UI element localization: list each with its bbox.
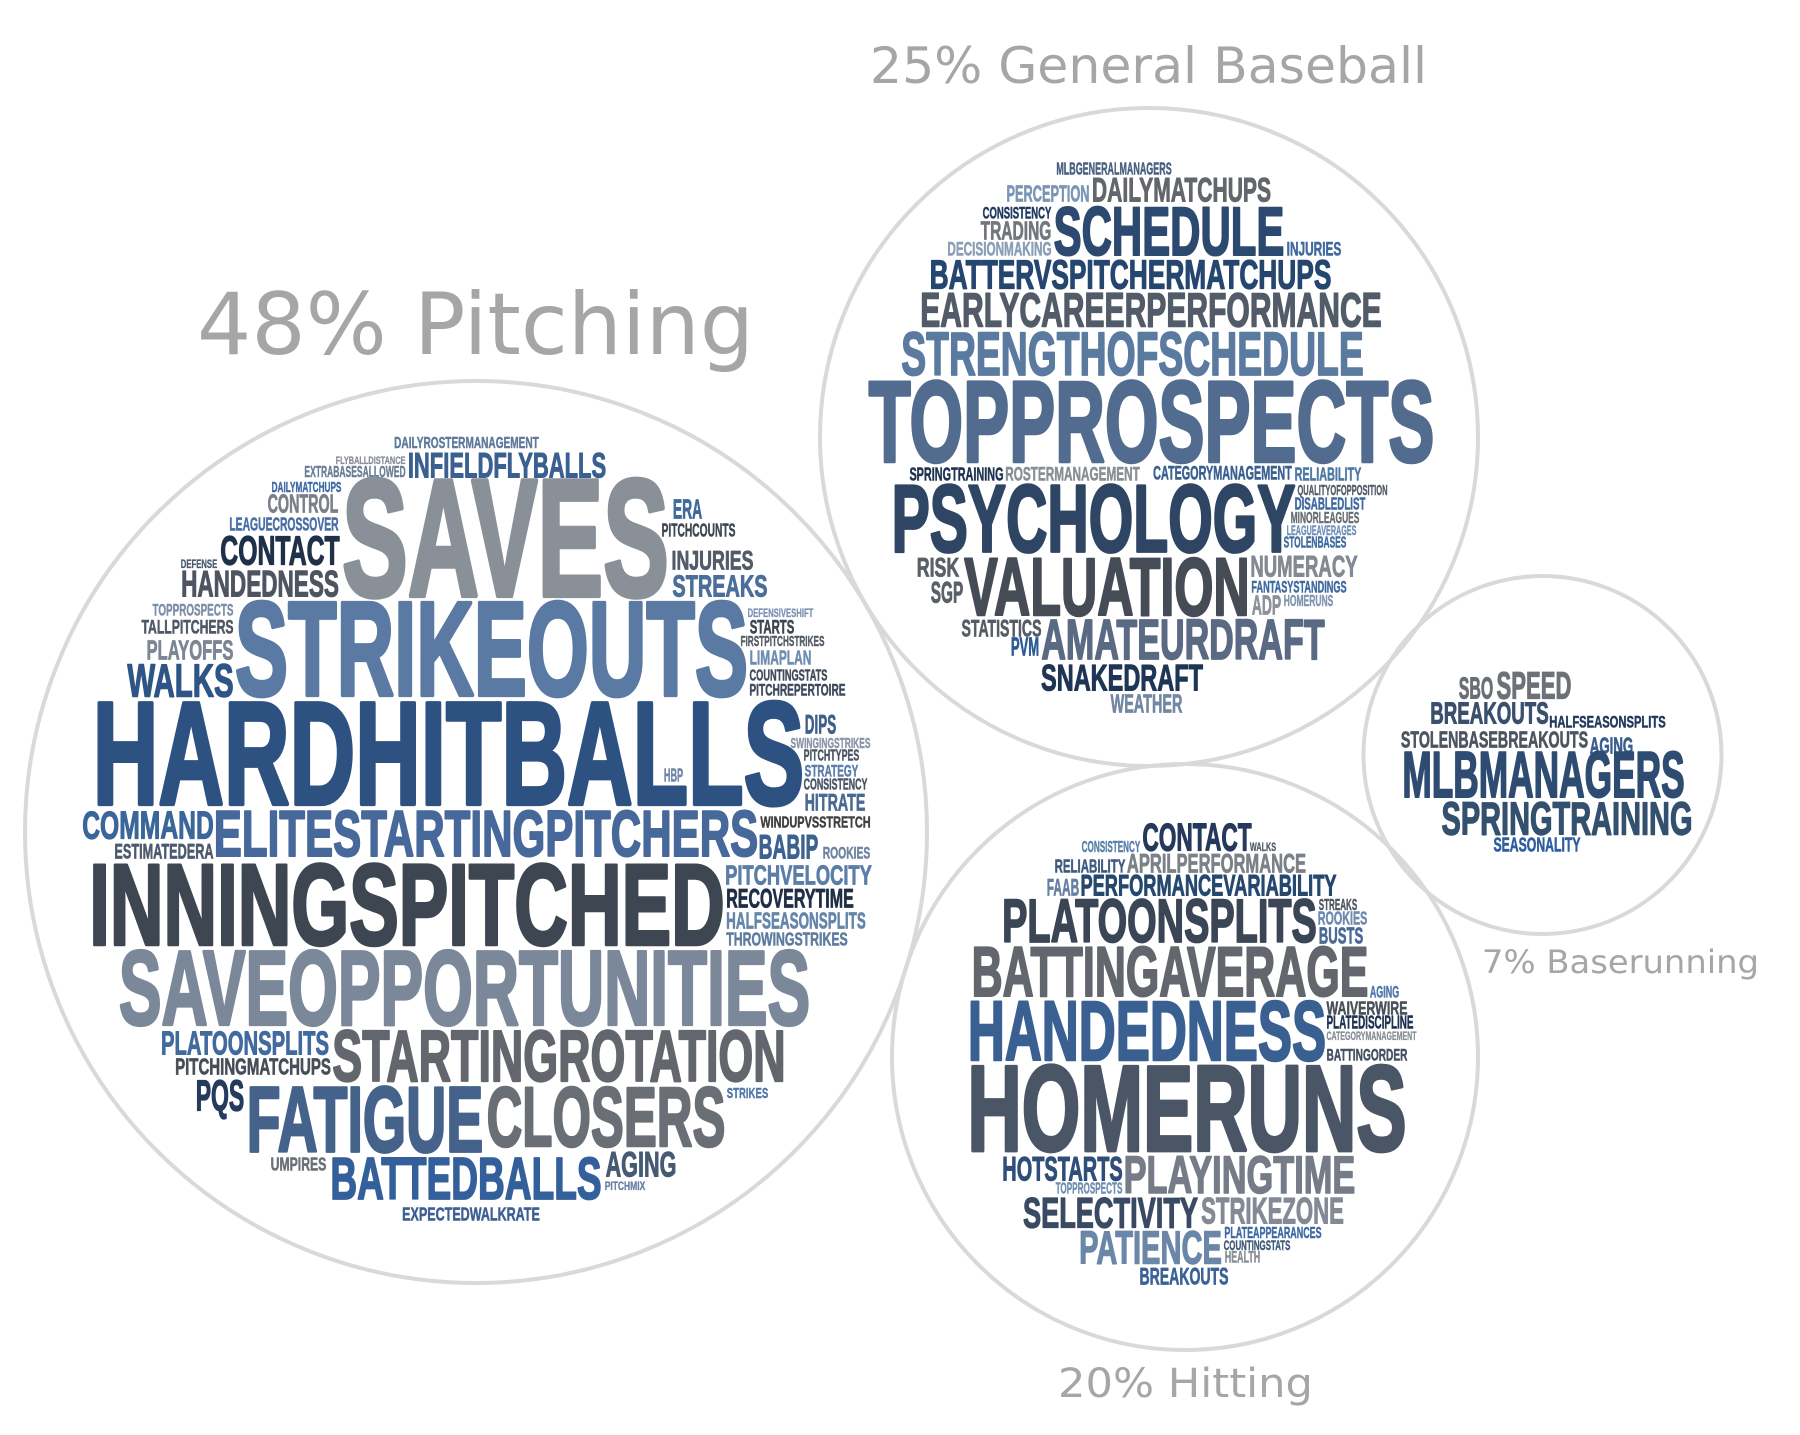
word cloud: hitting: BUSTS xyxy=(1319,923,1363,949)
word cloud: general baseball: CONSISTENCY xyxy=(983,205,1051,223)
word cloud: hitting: CONSISTENCY xyxy=(1082,839,1140,856)
word cloud: pitching: THROWINGSTRIKES xyxy=(726,929,848,950)
circle outline: baserunning xyxy=(1364,576,1722,934)
word cloud: pitching: CONSISTENCY xyxy=(804,777,867,794)
word cloud: hitting: APRILPERFORMANCE xyxy=(1127,848,1306,879)
word cloud: pitching: ERA xyxy=(673,493,702,525)
word cloud: pitching: PITCHCOUNTS xyxy=(662,520,735,541)
word cloud: hitting: PLATEDISCIPLINE xyxy=(1326,1012,1414,1033)
word cloud: general baseball: RELIABILITY xyxy=(1295,464,1361,485)
word cloud: pitching: COMMAND xyxy=(82,804,214,847)
word cloud: pitching: RECOVERYTIME xyxy=(726,883,854,914)
word cloud: general baseball: HOMERUNS xyxy=(1284,593,1333,610)
word cloud: general baseball: DAILYMATCHUPS xyxy=(1092,172,1271,210)
word cloud: pitching: SWINGINGSTRIKES xyxy=(791,736,870,752)
word cloud: general baseball: ROSTERMANAGEMENT xyxy=(1005,464,1140,486)
word cloud: general baseball: CATEGORYMANAGEMENT xyxy=(1153,463,1292,485)
word cloud: pitching: FATIGUE xyxy=(247,1069,483,1172)
word cloud: hitting: WALKS xyxy=(1250,840,1276,854)
word cloud: pitching: LEAGUECROSSOVER xyxy=(229,514,339,535)
word cloud: pitching: BATTEDBALLS xyxy=(330,1145,602,1212)
word cloud: hitting: SELECTIVITY xyxy=(1023,1189,1198,1236)
word cloud: general baseball: TOPPROSPECTS xyxy=(869,357,1434,487)
word cloud: pitching: EXTRABASESALLOWED xyxy=(304,464,406,481)
word cloud: pitching: PITCHTYPES xyxy=(804,748,859,765)
word cloud: baserunning: AGING xyxy=(1590,733,1633,759)
word cloud: general baseball: SCHEDULE xyxy=(1054,193,1284,270)
heading: 20% Hitting: 20% Hitting xyxy=(1058,1361,1313,1407)
word cloud: general baseball xyxy=(869,159,1434,719)
word cloud: pitching: HANDEDNESS xyxy=(181,563,339,605)
word cloud: general baseball: DISABLEDLIST xyxy=(1295,494,1366,514)
word cloud: pitching: DAILYMATCHUPS xyxy=(272,480,341,496)
word cloud: hitting: PERFORMANCEVARIABILITY xyxy=(1080,869,1337,903)
heading: 48% Pitching: 48% Pitching xyxy=(197,275,754,375)
word cloud: pitching: DAILYROSTERMANAGEMENT xyxy=(394,435,539,452)
word cloud: hitting: AGING xyxy=(1370,984,1399,1002)
word cloud: hitting: PLAYINGTIME xyxy=(1124,1147,1355,1205)
word cloud: pitching: INFIELDFLYBALLS xyxy=(408,447,606,486)
word cloud: pitching: PLAYOFFS xyxy=(146,634,234,666)
word cloud: pitching: DEFENSE xyxy=(181,557,217,571)
word cloud: pitching: INNINGSPITCHED xyxy=(89,840,725,970)
word cloud: general baseball: VALUATION xyxy=(964,542,1250,633)
word cloud: pitching: AGING xyxy=(606,1146,676,1185)
panel: pitching xyxy=(25,275,927,1283)
word cloud: general baseball: STOLENBASES xyxy=(1284,535,1346,552)
word cloud: hitting: BREAKOUTS xyxy=(1139,1263,1229,1290)
word cloud: pitching: HALFSEASONSPLITS xyxy=(726,908,866,934)
word cloud: pitching: WALKS xyxy=(127,654,234,706)
word cloud: general baseball: SPRINGTRAINING xyxy=(909,464,1004,485)
word cloud: hitting: ROOKIES xyxy=(1318,908,1367,929)
word cloud: pitching: PITCHREPERTOIRE xyxy=(749,682,846,700)
word cloud: hitting: WAIVERWIRE xyxy=(1327,998,1407,1019)
circle outline: hitting xyxy=(892,764,1478,1350)
word cloud: hitting: COUNTINGSTATS xyxy=(1224,1238,1290,1253)
word cloud: general baseball: EARLYCAREERPERFORMANCE xyxy=(920,284,1382,337)
word cloud: general baseball: WEATHER xyxy=(1111,690,1182,719)
word cloud: pitching: PITCHMIX xyxy=(605,1179,646,1193)
word cloud: pitching: CLOSERS xyxy=(487,1069,725,1164)
word cloud: hitting: HEALTH xyxy=(1225,1249,1260,1267)
word cloud: hitting: RELIABILITY xyxy=(1055,856,1125,877)
word cloud: baserunning: SBO xyxy=(1459,671,1493,706)
heading: 25% General Baseball: 25% General Baseball xyxy=(870,37,1427,95)
word cloud: pitching: HITRATE xyxy=(805,789,865,816)
word cloud: hitting: BATTINGORDER xyxy=(1327,1047,1408,1065)
word cloud: hitting: HOMERUNS xyxy=(967,1040,1407,1176)
word cloud: pitching: STRATEGY xyxy=(805,763,858,781)
word cloud: pitching: CONTROL xyxy=(268,490,338,519)
word cloud: general baseball: PERCEPTION xyxy=(1007,181,1089,207)
word cloud: pitching: STARTS xyxy=(750,617,794,639)
word cloud: pitching: BABIP xyxy=(759,829,818,867)
word cloud: pitching: DEFENSIVESHIFT xyxy=(748,606,814,620)
word cloud: hitting xyxy=(967,816,1417,1290)
word cloud: general baseball: SGP xyxy=(931,576,963,610)
word cloud: hitting: STRIKEZONE xyxy=(1201,1190,1344,1232)
word cloud: pitching: PQS xyxy=(196,1072,244,1120)
word cloud: hitting: HOTSTARTS xyxy=(1002,1151,1123,1189)
word cloud: pitching: ELITESTARTINGPITCHERS xyxy=(214,798,758,870)
word cloud: pitching: SAVEOPPORTUNITIES xyxy=(119,930,810,1048)
panel: hitting xyxy=(892,764,1478,1407)
word cloud: general baseball: RISK xyxy=(917,552,959,583)
word cloud: general baseball: STRENGTHOFSCHEDULE xyxy=(901,320,1364,388)
panel: general baseball xyxy=(820,37,1478,766)
word cloud: pitching: COUNTINGSTATS xyxy=(750,668,827,685)
word cloud: general baseball: LEAGUEAVERAGES xyxy=(1287,523,1356,538)
word cloud: general baseball: DECISIONMAKING xyxy=(947,239,1052,261)
word cloud: pitching: TALLPITCHERS xyxy=(141,617,234,639)
word cloud: general baseball: BATTERVSPITCHERMATCHUPS xyxy=(930,251,1331,297)
word cloud: pitching: LIMAPLAN xyxy=(750,648,811,670)
word cloud: general baseball: PSYCHOLOGY xyxy=(892,466,1295,573)
word cloud: pitching: STRIKEOUTS xyxy=(235,575,748,724)
word cloud: hitting: HANDEDNESS xyxy=(968,983,1326,1078)
word cloud: pitching: FLYBALLDISTANCE xyxy=(336,455,406,467)
word cloud: general baseball: TRADING xyxy=(981,217,1051,246)
word cloud: baserunning: SPEED xyxy=(1497,665,1571,708)
word cloud: pitching: DIPS xyxy=(805,709,836,740)
word cloud: hitting: PLATOONSPLITS xyxy=(1002,887,1317,955)
word cloud: pitching: ESTIMATEDERA xyxy=(114,840,214,864)
word cloud: baserunning: SEASONALITY xyxy=(1493,835,1581,857)
word cloud: general baseball: FANTASYSTANDINGS xyxy=(1251,579,1347,597)
word cloud: baserunning: BREAKOUTS xyxy=(1430,696,1549,731)
word cloud: baserunning xyxy=(1401,665,1692,857)
word cloud: pitching: INJURIES xyxy=(672,545,753,576)
word cloud: pitching: CONTACT xyxy=(220,527,340,573)
word cloud: general baseball: SNAKEDRAFT xyxy=(1041,657,1203,699)
word cloud: general baseball: NUMERACY xyxy=(1250,550,1358,584)
word cloud: pitching: STRIKES xyxy=(727,1086,768,1102)
word cloud: baserunning: HALFSEASONSPLITS xyxy=(1549,714,1666,732)
word cloud: pitching: PLATOONSPLITS xyxy=(161,1024,329,1062)
word cloud: pitching: EXPECTEDWALKRATE xyxy=(402,1204,540,1225)
word cloud: pitching: ROOKIES xyxy=(823,845,870,863)
word cloud: pitching: SAVES xyxy=(342,445,669,632)
word cloud: hitting: CONTACT xyxy=(1142,816,1252,859)
word cloud: pitching: PITCHINGMATCHUPS xyxy=(175,1054,331,1080)
word cloud: pitching: UMPIRES xyxy=(271,1154,326,1175)
word cloud: baserunning: STOLENBASEBREAKOUTS xyxy=(1401,727,1588,753)
circle outline: general baseball xyxy=(820,108,1478,766)
word cloud: general baseball: MINORLEAGUES xyxy=(1291,510,1359,527)
word cloud: pitching: HARDHITBALLS xyxy=(93,672,804,835)
word cloud: hitting: STREAKS xyxy=(1319,897,1357,914)
word cloud: general baseball: PVM xyxy=(1011,633,1039,662)
word cloud: hitting: FAAB xyxy=(1047,874,1079,901)
word cloud: hitting: BATTINGAVERAGE xyxy=(972,932,1368,1011)
word cloud: pitching: FIRSTPITCHSTRIKES xyxy=(741,634,824,650)
word cloud: pitching: PITCHVELOCITY xyxy=(725,859,872,891)
panel: baserunning xyxy=(1364,576,1759,981)
word cloud: general baseball: MLBGENERALMANAGERS xyxy=(1056,159,1172,179)
word cloud: pitching xyxy=(82,435,872,1225)
word cloud: hitting: PLATEAPPEARANCES xyxy=(1224,1225,1322,1242)
word cloud: pitching: STREAKS xyxy=(672,569,768,604)
heading: 7% Baserunning: 7% Baserunning xyxy=(1482,943,1759,981)
word cloud: hitting: CATEGORYMANAGEMENT xyxy=(1326,1029,1417,1043)
word cloud: pitching: WINDUPVSSTRETCH xyxy=(760,815,871,832)
word cloud: hitting: TOPPROSPECTS xyxy=(1056,1181,1122,1198)
word cloud: pitching: STARTINGROTATION xyxy=(332,1016,786,1097)
word cloud: general baseball: INJURIES xyxy=(1287,239,1341,261)
word cloud: hitting: PATIENCE xyxy=(1079,1221,1222,1273)
word cloud: general baseball: QUALITYOFOPPOSITION xyxy=(1297,483,1388,499)
word cloud: pitching: TOPPROSPECTS xyxy=(153,602,234,620)
word cloud: general baseball: AMATEURDRAFT xyxy=(1041,608,1325,671)
circle outline: pitching xyxy=(25,381,927,1283)
word cloud: general baseball: ADP xyxy=(1252,589,1281,621)
word cloud: general baseball: STATISTICS xyxy=(962,615,1041,642)
word cloud: pitching: HBP xyxy=(664,765,683,786)
